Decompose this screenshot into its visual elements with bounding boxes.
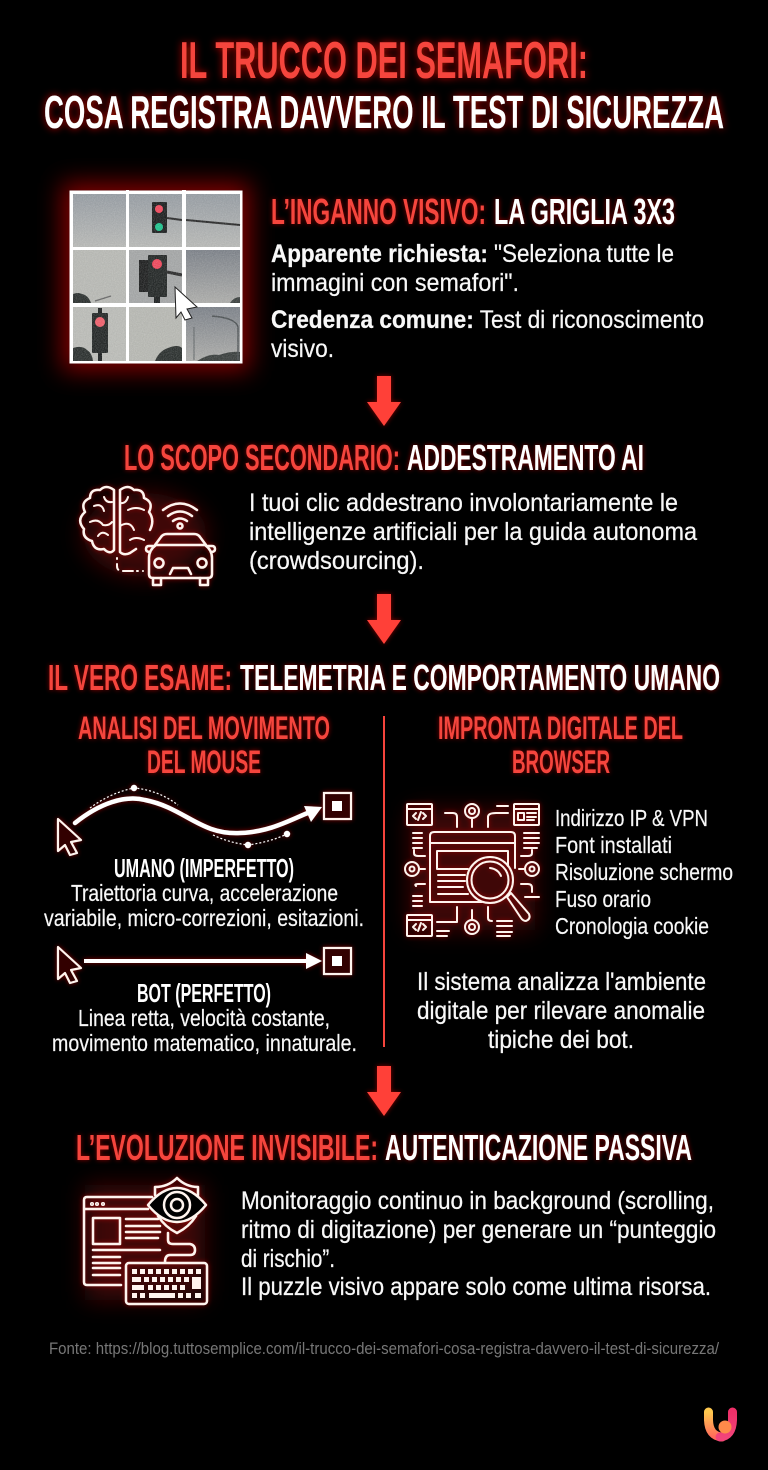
list: browser fingerprint: Cronologia cookie [555, 913, 709, 939]
icon: logo [708, 1412, 732, 1437]
text block: human: UMANO (IMPERFETTO) [114, 853, 294, 883]
heading: griglia: LA GRIGLIA 3X3 [494, 191, 675, 232]
arrow 1 [367, 376, 401, 426]
list: browser fingerprint: Indirizzo IP & VPN [555, 805, 708, 831]
text block: bot: movimento matematico, innaturale. [52, 1030, 357, 1056]
heading: impronta digitale: BROWSER [512, 744, 610, 780]
divider [383, 716, 385, 1047]
list: browser fingerprint: Font installati [555, 832, 672, 858]
panel: griglia 3x3 [62, 183, 250, 371]
icon: cursor [175, 287, 197, 320]
text block: browser: tipiche dei bot. [488, 1026, 634, 1054]
text block: addestramento: I tuoi clic addestrano involontariamente le [249, 489, 678, 517]
icon: eye shield and keyboard [84, 1178, 207, 1304]
heading: impronta digitale [438, 710, 683, 780]
heading: addestramento: LO SCOPO SECONDARIO: [124, 437, 400, 478]
chart: human mouse path [58, 785, 351, 855]
text block: addestramento: intelligenze artificiali per la guida autonoma [249, 518, 697, 546]
chart: bot mouse path [58, 947, 351, 983]
heading: analisi del mouse: ANALISI DEL MOVIMENTO [78, 710, 330, 746]
text block: browser: digitale per rilevare anomalie [417, 997, 705, 1025]
noise: photo grain [70, 190, 242, 363]
text block: autenticazione: Il puzzle visivo appare solo come ultima risorsa. [241, 1273, 711, 1301]
text block: griglia: Apparente richiesta: "Seleziona tutte le [271, 240, 674, 268]
arrow 3 [367, 1066, 401, 1116]
scenery: trees and street lamp [73, 293, 240, 361]
text block: griglia: immagini con semafori". [271, 269, 519, 297]
text block: autenticazione: di rischio”. [241, 1245, 335, 1273]
icon: traffic light centre [139, 255, 182, 303]
list: browser fingerprint: Risoluzione schermo [555, 859, 733, 885]
text block: autenticazione: Monitoraggio continuo in background (scrolling, [241, 1187, 714, 1215]
icon: brain and car [80, 487, 215, 585]
arrow 2 [367, 594, 401, 644]
text block: browser: Il sistema analizza l'ambiente [417, 968, 706, 996]
text block: addestramento [249, 489, 697, 575]
heading: telemetria: IL VERO ESAME: [48, 657, 232, 698]
text block: griglia [271, 240, 704, 363]
text block: griglia: visivo. [271, 335, 334, 363]
heading: griglia: L’INGANNO VISIVO: [271, 191, 486, 232]
text block: human: variabile, micro-correzioni, esitazioni. [44, 905, 364, 931]
text block: browser [417, 968, 706, 1054]
icon: browser inspection [405, 804, 539, 936]
text block: autenticazione: ritmo di digitazione) per generare un “punteggio [241, 1216, 716, 1244]
text block: addestramento: (crowdsourcing). [249, 547, 424, 575]
title [44, 32, 724, 138]
heading: telemetria [48, 657, 720, 698]
text block: griglia: Credenza comune: Test di riconoscimento [271, 306, 704, 334]
icon: traffic light top [152, 202, 240, 233]
text block: human: Traiettoria curva, accelerazione [71, 880, 338, 906]
heading: autenticazione: L’EVOLUZIONE INVISIBILE: [76, 1127, 378, 1168]
text block: bot [52, 978, 357, 1056]
heading: analisi del mouse [78, 710, 330, 780]
text block: human [44, 853, 364, 931]
heading: analisi del mouse: DEL MOUSE [147, 744, 261, 780]
text block: bot: Linea retta, velocità costante, [78, 1005, 330, 1031]
icon: traffic light bottom [92, 308, 108, 361]
list: browser fingerprint [555, 805, 733, 939]
list: browser fingerprint: Fuso orario [555, 886, 651, 912]
text block: bot: BOT (PERFETTO) [137, 978, 271, 1008]
text block: autenticazione [241, 1187, 716, 1301]
